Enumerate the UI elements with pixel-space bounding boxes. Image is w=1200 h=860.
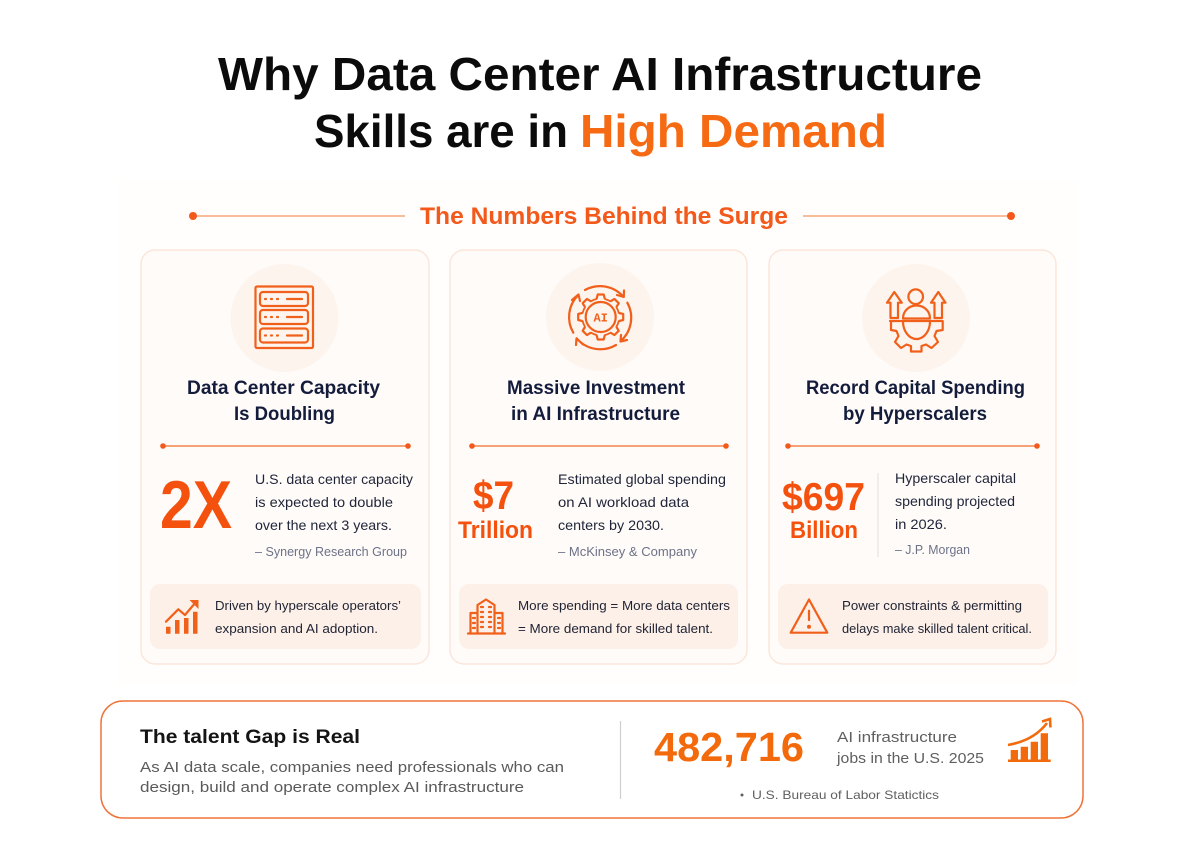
stat description: Hyperscaler capital [895,470,1016,486]
panel: data center capacity [141,250,429,664]
stat description [895,470,1016,557]
stat description: on AI workload data [558,494,689,510]
talent gap text: As AI data scale, companies need professionals who can [140,759,564,776]
icon: warning triangle [791,600,827,633]
card heading: Is Doubling [234,404,335,425]
card heading: Data Center Capacity [187,378,380,399]
title: Why Data Center AI Infrastructure [218,48,982,100]
title: High Demand [580,105,887,157]
stat description: Estimated global spending [558,471,726,487]
title [218,48,982,157]
panel: AI investment [450,250,747,664]
icon: person with gear and arrows [862,264,970,372]
icon: rising bars [1008,719,1051,762]
callout [150,584,421,649]
stat description: – Synergy Research Group [255,544,407,559]
source: U.S. Bureau of Labor Statictics [752,788,939,802]
stat description: U.S. data center capacity [255,471,413,487]
callout: Driven by hyperscale operators’ [215,598,401,613]
icon: server rack [230,264,338,372]
callout: delays make skilled talent critical. [842,621,1032,636]
jobs label: AI infrastructure [837,730,957,746]
stat: 482,716: 482,716 [654,724,804,770]
stat: $697 billion: $697 [782,476,865,519]
stat: $7 trillion: $7 [473,474,514,518]
callout: expansion and AI adoption. [215,621,378,636]
stat: $7 trillion [458,474,533,544]
card heading: Massive Investment [507,378,686,399]
stat: 2X: 2X [160,467,232,543]
panel: hyperscaler spending [769,250,1056,664]
title: Skills are in [314,105,568,157]
talent gap heading: The talent Gap is Real [140,727,360,748]
stat: $697 billion: Billion [790,517,858,544]
stat description: – J.P. Morgan [895,542,970,557]
jobs label [836,730,984,767]
callout: = More demand for skilled talent. [518,621,713,636]
callout [459,584,738,649]
card heading [507,378,686,425]
jobs label: jobs in the U.S. 2025 [836,751,984,767]
icon: growth chart [166,600,198,634]
card heading: Record Capital Spending [806,378,1025,399]
card heading [806,378,1025,425]
icon: buildings [468,600,505,634]
talent gap text [140,759,564,796]
callout: More spending = More data centers [518,598,731,613]
stat description [558,471,726,559]
callout [778,584,1048,649]
stat description [255,471,413,559]
stat description: over the next 3 years. [255,517,392,533]
stat: $697 billion [782,476,865,544]
card heading: by Hyperscalers [843,404,987,425]
section heading [189,203,1015,230]
icon: AI gear: AI [593,312,608,326]
stat description: in 2026. [895,516,947,532]
stat description: is expected to double [255,494,393,510]
callout: Power constraints & permitting [842,598,1022,613]
panel: talent gap [101,701,1083,818]
card heading: in AI Infrastructure [511,404,680,425]
stat description: centers by 2030. [558,517,664,533]
stat: $7 trillion: Trillion [458,517,533,544]
stat description: – McKinsey & Company [558,544,697,559]
stat description: spending projected [895,493,1015,509]
icon: AI gear [546,263,654,371]
talent gap text: design, build and operate complex AI infrastructure [140,779,524,796]
section heading: The Numbers Behind the Surge [420,203,788,230]
card heading [187,378,380,425]
